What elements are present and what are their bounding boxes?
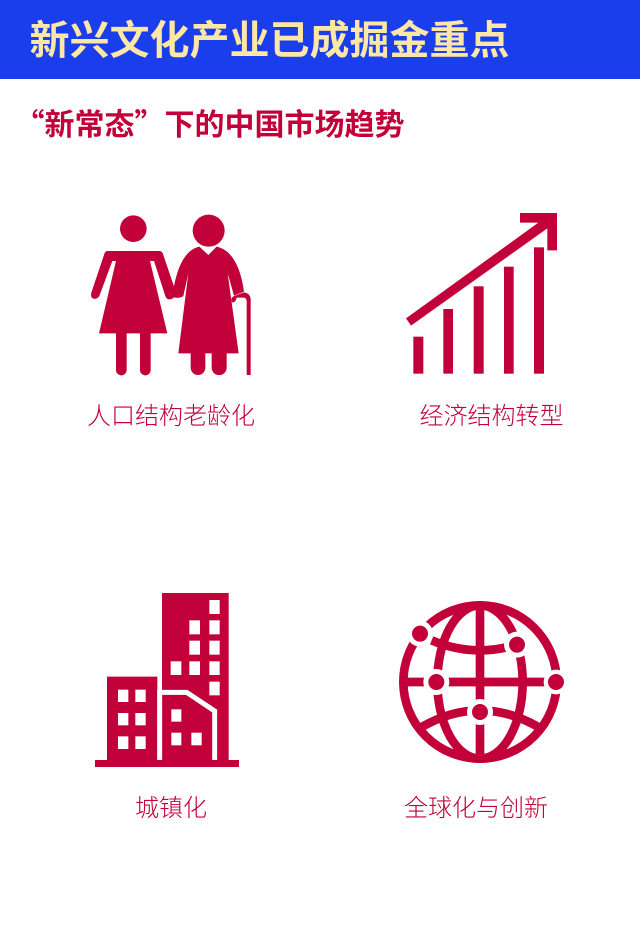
label: ageing population: 人口结构老龄化 — [87, 396, 255, 431]
label: economic restructuring: 经济结构转型 — [420, 396, 564, 431]
label: globalisation and innovation: 全球化与创新 — [404, 788, 548, 823]
icon: rising bar chart with arrow — [406, 213, 557, 374]
label: urbanisation: 城镇化 — [135, 788, 207, 823]
subtitle: “新常态”下的中国市场趋势 — [14, 100, 404, 144]
icon: globe network — [402, 604, 568, 760]
header banner — [0, 0, 640, 79]
title: 新兴文化产业已成掘金重点 — [30, 8, 510, 66]
icon: city buildings — [95, 593, 239, 767]
icon: elderly couple — [91, 215, 251, 375]
